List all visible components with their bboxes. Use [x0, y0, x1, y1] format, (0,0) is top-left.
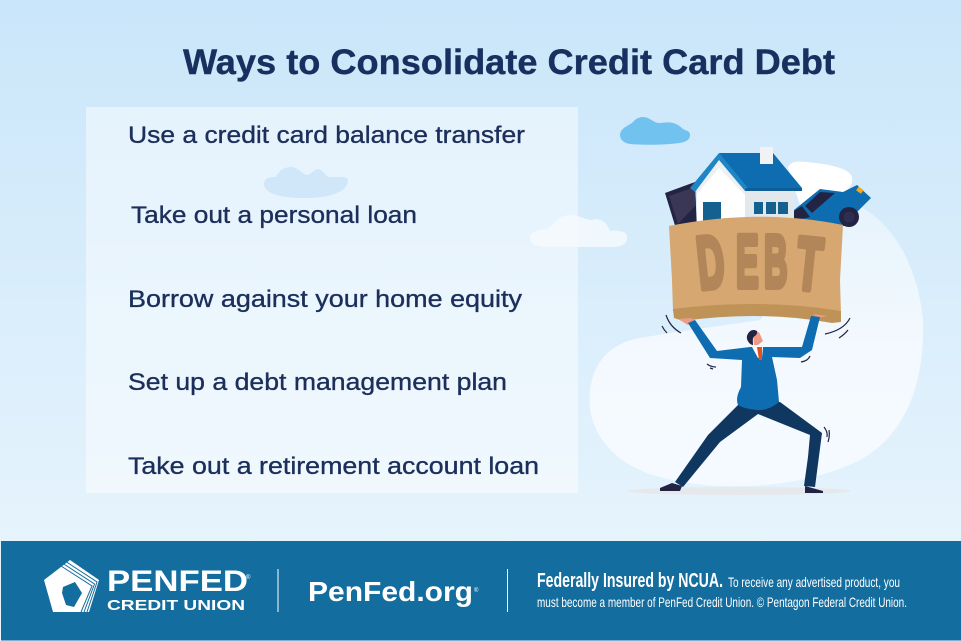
- house: [690, 147, 802, 226]
- legs: [675, 402, 822, 487]
- list items: [128, 122, 539, 480]
- disclaimer: [537, 570, 907, 610]
- illustration: man lifting debt: [627, 147, 871, 495]
- logo mark: [44, 560, 99, 612]
- ncua heading: Federally Insured by NCUA.: [537, 570, 723, 592]
- tie: [757, 347, 762, 360]
- B: B: [764, 221, 788, 304]
- collar: [752, 345, 763, 358]
- debt sack: [669, 217, 843, 315]
- man: [660, 314, 827, 493]
- hands: [678, 318, 695, 325]
- panel: list background: [86, 107, 578, 493]
- tablet: [665, 182, 697, 232]
- footer band: [1, 541, 961, 640]
- registered mark: ®: [474, 587, 479, 594]
- debt lettering: [693, 221, 826, 307]
- D: D: [693, 221, 728, 305]
- item 5: Take out a retirement account loan: [128, 453, 539, 480]
- background blob: [589, 203, 923, 486]
- T: T: [792, 222, 826, 307]
- item 1: Use a credit card balance transfer: [128, 122, 525, 149]
- E: E: [736, 221, 759, 304]
- motion lines: [662, 315, 850, 442]
- item 3: Borrow against your home equity: [128, 286, 523, 313]
- cloud: pale behind panel: [264, 167, 348, 198]
- head: [753, 332, 763, 345]
- cloud: white: [530, 215, 627, 247]
- logo wordmark: PENFED: [107, 565, 248, 598]
- ground shadow: [627, 487, 851, 495]
- item 4: Set up a debt management plan: [128, 369, 507, 396]
- divider: [278, 569, 279, 612]
- white blob behind car: [788, 162, 852, 205]
- line 1: To receive any advertised product, you: [728, 574, 900, 590]
- registered mark: ®: [246, 574, 251, 581]
- website: PenFed.org: [308, 576, 473, 607]
- credit union: CREDIT UNION: [107, 597, 245, 614]
- cloud: blue: [620, 117, 690, 145]
- divider: [507, 569, 508, 612]
- item 2: Take out a personal loan: [131, 202, 417, 229]
- torso and arms: [688, 316, 820, 410]
- car: [794, 185, 871, 227]
- shoes: [660, 483, 682, 491]
- title: Ways to Consolidate Credit Card Debt: [183, 43, 835, 82]
